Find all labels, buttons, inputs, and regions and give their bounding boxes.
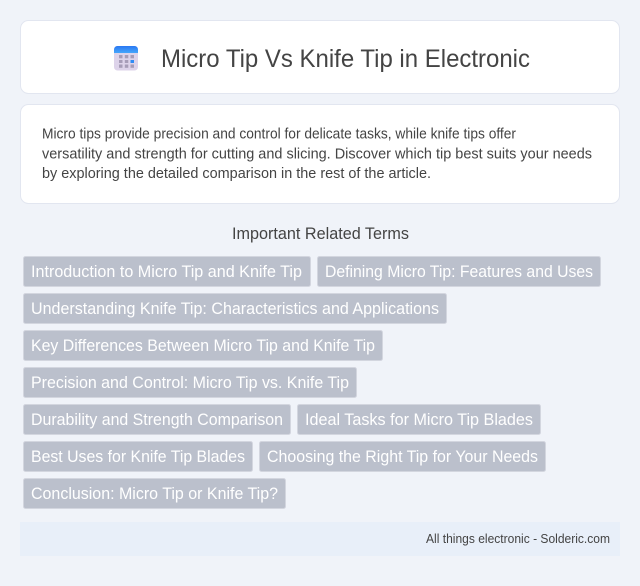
chip: understanding knife tip <box>24 294 446 324</box>
chip: ideal tasks: Ideal Tasks for Micro Tip Blades <box>305 411 533 429</box>
chip: ideal tasks <box>298 404 540 434</box>
chip: defining micro tip <box>318 256 600 286</box>
chip: choosing the right tip: Choosing the Right Tip for Your Needs <box>267 448 538 466</box>
chip: defining micro tip: Defining Micro Tip: Features and Uses <box>325 263 593 281</box>
chip: durability <box>24 404 290 434</box>
footer: All things electronic - Solderic.com <box>426 532 610 546</box>
chip: introduction <box>24 256 310 286</box>
section heading: Important Related Terms <box>232 225 409 243</box>
chip: key differences <box>24 330 382 360</box>
chip: durability: Durability and Strength Comparison <box>31 411 283 429</box>
chip: precision and control <box>24 368 356 398</box>
term chips <box>24 256 600 508</box>
chip: conclusion <box>24 478 286 508</box>
chip: choosing the right tip <box>260 442 546 472</box>
chip: key differences: Key Differences Between Micro Tip and Knife Tip <box>31 337 375 355</box>
chip: conclusion: Conclusion: Micro Tip or Knife Tip? <box>31 485 278 503</box>
footer <box>20 522 620 556</box>
icon: calendar <box>114 46 138 70</box>
title: Micro Tip Vs Knife Tip in Electronic <box>161 45 530 73</box>
intro text panel: by exploring the detailed comparison in the rest of the article. <box>42 165 431 182</box>
intro text panel: versatility and strength for cutting and slicing. Discover which tip best suits your needs <box>42 146 592 162</box>
header panel <box>20 20 620 94</box>
chip: best uses: Best Uses for Knife Tip Blades <box>31 448 245 466</box>
chip: precision and control: Precision and Control: Micro Tip vs. Knife Tip <box>31 374 349 392</box>
intro text panel <box>20 104 620 204</box>
chip: best uses <box>24 442 252 472</box>
chip: understanding knife tip: Understanding Knife Tip: Characteristics and Applications <box>31 300 439 318</box>
intro text panel: Micro tips provide precision and control for delicate tasks, while knife tips offer <box>42 126 516 142</box>
chip: introduction: Introduction to Micro Tip and Knife Tip <box>31 263 302 281</box>
